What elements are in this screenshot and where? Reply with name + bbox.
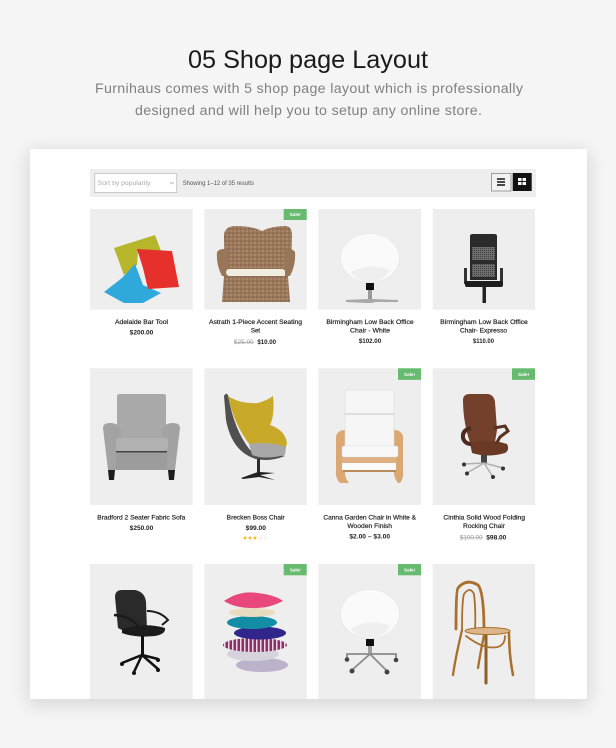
icon: yellow wing chair <box>224 394 287 480</box>
product: Adelaide Bar Tool: Adelaide Bar Tool <box>115 319 168 326</box>
product: Bradford sofa: Bradford 2 Seater Fabric Sofa <box>97 514 186 522</box>
results count: Showing 1–12 of 35 results <box>183 181 254 187</box>
sale badge <box>512 368 535 380</box>
product: Bradford sofa: $250.00 <box>130 525 154 532</box>
product: Cinthia Rocking Chair: Cinthia Solid Wood Folding <box>443 514 526 522</box>
toolbar <box>90 169 536 197</box>
product: Brecken Boss Chair: Brecken Boss Chair <box>227 514 285 522</box>
panel: shop page screenshot <box>30 149 587 700</box>
product: bentwood chair <box>433 564 535 700</box>
sort dropdown: Sort by popularity <box>98 181 151 187</box>
subtitle text: Furnihaus comes with 5 shop page layout which is professionally <box>95 81 524 97</box>
sort dropdown <box>95 174 177 192</box>
icon: grey armchair <box>103 394 180 480</box>
product: Birmingham Expresso: $110.00 <box>473 338 494 345</box>
sale badge: Sale! <box>290 212 301 217</box>
icon: wicker armchair <box>217 226 295 302</box>
icon: black office chair <box>464 234 503 303</box>
product: black office chair <box>90 564 193 700</box>
product: Canna Garden Chair <box>318 368 421 540</box>
product: Birmingham Expresso: Birmingham Low Back Office <box>440 319 528 326</box>
product: Birmingham White: Chair - White <box>350 328 391 334</box>
product: Birmingham Expresso: Chair- Expresso <box>460 328 508 334</box>
sale badge <box>398 368 421 380</box>
product: pillow stack <box>204 564 307 700</box>
icon: grid view <box>513 173 532 191</box>
sale badge: Sale! <box>404 568 415 572</box>
product: Birmingham Expresso <box>433 209 535 345</box>
product: Canna Garden Chair: Canna Garden Chair in White & <box>323 514 417 522</box>
product: Cinthia Rocking Chair <box>433 368 535 542</box>
product: Adelaide Bar Tool <box>90 209 193 336</box>
product: Birmingham White: $102.00 <box>359 338 382 345</box>
star rating: ★★★ <box>242 534 258 542</box>
product: Astrath chair <box>204 209 307 346</box>
product: Brecken Boss Chair: ☆☆ <box>258 534 268 542</box>
icon: bentwood chair <box>453 582 513 683</box>
icon: list view <box>492 174 511 191</box>
icon: white chair on casters <box>340 590 400 674</box>
product: Astrath chair: $25.00 <box>234 339 254 346</box>
product: Birmingham White: Birmingham Low Back Office <box>326 319 414 326</box>
product: Bradford sofa <box>90 368 193 532</box>
icon: black task chair <box>114 590 168 675</box>
icon: stacked pillows <box>223 592 288 672</box>
sale badge: Sale! <box>290 568 301 572</box>
product: Canna Garden Chair: $2.00 – $3.00 <box>349 534 391 540</box>
icon: white swivel chair <box>340 234 400 303</box>
product: Canna Garden Chair: Wooden Finish <box>347 523 393 530</box>
product: Birmingham White <box>318 209 421 345</box>
product: Adelaide Bar Tool: $200.00 <box>130 330 154 336</box>
product: Cinthia Rocking Chair: $100.00 <box>460 534 483 542</box>
icon: wooden frame chair <box>336 390 403 483</box>
title: 05 Shop page Layout <box>188 46 428 74</box>
product: Astrath chair: $10.00 <box>257 339 276 346</box>
product: Astrath chair: Astrath 1-Piece Accent Seating <box>209 319 303 326</box>
product: white swivel chair <box>318 564 421 700</box>
subtitle text <box>95 81 524 119</box>
product: Brecken Boss Chair <box>204 368 307 542</box>
product: Cinthia Rocking Chair: $98.00 <box>486 534 507 542</box>
sale badge: Sale! <box>404 372 415 377</box>
icon: pillows <box>104 235 179 303</box>
icon: brown office chair <box>462 394 508 479</box>
product: Brecken Boss Chair: $99.00 <box>246 525 266 532</box>
sale badge: Sale! <box>518 372 529 377</box>
product: Astrath chair: Set <box>251 328 260 334</box>
card shadow <box>28 151 589 705</box>
product: Cinthia Rocking Chair: Rocking Chair <box>463 523 505 530</box>
subtitle text: designed and will help you to setup any online store. <box>135 103 482 119</box>
